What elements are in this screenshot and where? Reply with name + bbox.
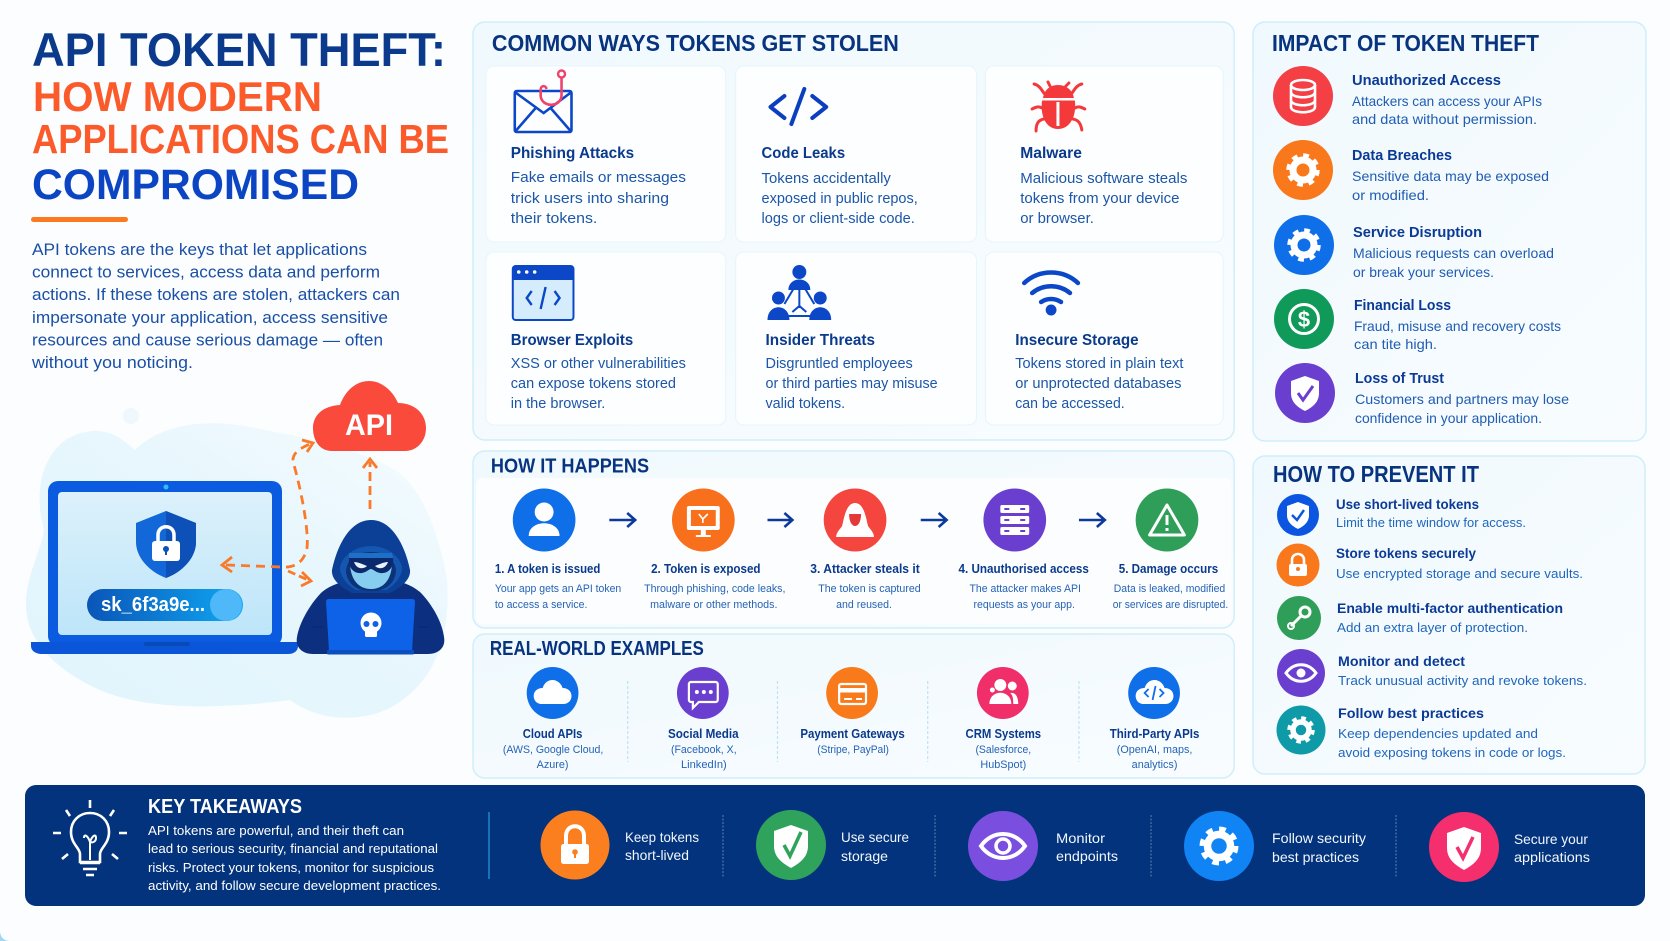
prevention: best practices: Keep dependencies updated and bbox=[1338, 726, 1538, 741]
step 4: requests as your app. bbox=[973, 599, 1075, 611]
impact: unauthorized access: Unauthorized Access bbox=[1352, 72, 1501, 89]
card: insecure storage bbox=[985, 252, 1223, 425]
impact: data breaches bbox=[1273, 140, 1549, 203]
icon: bug bbox=[1032, 82, 1085, 131]
step 4 bbox=[959, 488, 1089, 611]
example: social media: (Facebook, X, bbox=[671, 744, 737, 756]
API cloud: API bbox=[345, 409, 393, 442]
card: browser exploits: XSS or other vulnerabilities bbox=[511, 355, 686, 372]
card: code leaks: Code Leaks bbox=[762, 145, 845, 162]
prevention: monitor and detect bbox=[1277, 649, 1587, 697]
example: cloud APIs bbox=[503, 667, 603, 771]
banner: key takeaways bbox=[25, 785, 1645, 906]
intro paragraph: API tokens are the keys that let applications bbox=[32, 240, 367, 259]
step 1 bbox=[495, 488, 621, 611]
card: insider threats: Insider Threats bbox=[766, 332, 875, 349]
card: malware: tokens from your device bbox=[1020, 190, 1179, 207]
impact: service disruption: Service Disruption bbox=[1353, 224, 1482, 241]
step 5: 5. Damage occurs bbox=[1119, 561, 1218, 576]
impact: financial loss bbox=[1274, 289, 1561, 352]
impact: data breaches: or modified. bbox=[1352, 187, 1429, 203]
step 4: 4. Unauthorised access bbox=[959, 561, 1089, 576]
panel: common ways tokens get stolen bbox=[473, 22, 1234, 440]
card: insecure storage: can be accessed. bbox=[1015, 395, 1125, 412]
impact: data breaches: Data Breaches bbox=[1352, 147, 1452, 164]
example: third-party APIs bbox=[1110, 667, 1199, 771]
background blob bbox=[26, 423, 447, 718]
summary text bbox=[148, 823, 441, 893]
impact: service disruption: or break your services. bbox=[1353, 264, 1494, 280]
card: browser exploits bbox=[486, 252, 726, 425]
step 3 bbox=[810, 488, 921, 611]
summary text: lead to serious security, financial and reputational bbox=[148, 841, 438, 856]
icon: browser window bbox=[513, 266, 573, 320]
prevention: store securely bbox=[1276, 544, 1583, 586]
summary text: API tokens are powerful, and their theft can bbox=[148, 823, 404, 838]
intro paragraph bbox=[31, 240, 400, 372]
example: third-party APIs: analytics) bbox=[1132, 759, 1177, 771]
prevention: short-lived tokens: Limit the time window for access. bbox=[1336, 515, 1526, 530]
example: cloud APIs: Azure) bbox=[537, 759, 569, 771]
card: browser exploits: in the browser. bbox=[511, 395, 605, 412]
impact: loss of trust: Customers and partners may lose bbox=[1355, 391, 1569, 407]
impact: financial loss: Fraud, misuse and recovery costs bbox=[1354, 318, 1561, 334]
card: phishing attacks: trick users into sharing bbox=[511, 190, 669, 207]
heading: HOW IT HAPPENS bbox=[491, 455, 649, 478]
API cloud bbox=[313, 381, 426, 451]
takeaway: monitor endpoints: Monitor bbox=[1056, 830, 1105, 846]
step 5: or services are disrupted. bbox=[1113, 599, 1228, 611]
heading: IMPACT OF TOKEN THEFT bbox=[1272, 30, 1539, 56]
prevention: short-lived tokens: Use short-lived tokens bbox=[1336, 496, 1479, 512]
takeaway: keep tokens short-lived: short-lived bbox=[625, 847, 689, 863]
prevention: multi-factor authentication bbox=[1277, 596, 1563, 640]
example: payment gateways bbox=[800, 667, 905, 756]
prevention: multi-factor authentication: Add an extra layer of protection. bbox=[1337, 620, 1528, 635]
example: cloud APIs: Cloud APIs bbox=[523, 727, 582, 741]
prevention: best practices: avoid exposing tokens in code or logs. bbox=[1338, 745, 1566, 760]
icon: skull bbox=[360, 612, 382, 637]
card: code leaks bbox=[736, 66, 976, 242]
example: CRM systems: (Salesforce, bbox=[975, 744, 1031, 756]
example: CRM systems bbox=[966, 667, 1041, 771]
heading: HOW TO PREVENT IT bbox=[1273, 461, 1479, 487]
hacker bbox=[297, 520, 444, 654]
card: browser exploits: Browser Exploits bbox=[511, 332, 633, 349]
icon: envelope with hook bbox=[515, 70, 571, 132]
step 2: Through phishing, code leaks, bbox=[644, 583, 785, 595]
card: malware: or browser. bbox=[1020, 210, 1094, 227]
panel: impact of token theft bbox=[1253, 22, 1646, 441]
takeaway: secure your applications: Secure your bbox=[1514, 831, 1588, 847]
takeaway: keep tokens short-lived bbox=[540, 810, 699, 880]
step 1: Your app gets an API token bbox=[495, 583, 621, 595]
title: APPLICATIONS CAN BE bbox=[32, 116, 449, 162]
takeaway: use secure storage bbox=[756, 810, 909, 880]
step 2: malware or other methods. bbox=[650, 599, 777, 611]
intro paragraph: actions. If these tokens are stolen, attackers can bbox=[32, 285, 400, 304]
takeaway: secure your applications: applications bbox=[1514, 849, 1590, 865]
card: insider threats: Disgruntled employees bbox=[766, 355, 913, 372]
impact: loss of trust: confidence in your application. bbox=[1355, 410, 1542, 426]
card: malware: Malicious software steals bbox=[1020, 170, 1187, 187]
arrow bbox=[768, 513, 792, 527]
card: phishing attacks: Fake emails or messages bbox=[511, 169, 686, 186]
prevention: monitor and detect: Monitor and detect bbox=[1338, 653, 1465, 669]
example: social media: LinkedIn) bbox=[681, 759, 727, 771]
impact: unauthorized access: Attackers can access your APIs bbox=[1352, 93, 1542, 109]
example: CRM systems: CRM Systems bbox=[966, 727, 1041, 741]
summary text: activity, and follow secure development practices. bbox=[148, 878, 441, 893]
arrow bbox=[609, 513, 635, 527]
step 2: 2. Token is exposed bbox=[651, 561, 761, 576]
icon: shield with lock bbox=[136, 511, 196, 578]
card: insecure storage: Tokens stored in plain text bbox=[1015, 355, 1184, 372]
panel: how to prevent it bbox=[1253, 456, 1645, 774]
prevention: best practices bbox=[1276, 705, 1566, 760]
step 5 bbox=[1113, 488, 1228, 611]
icon: code brackets bbox=[770, 89, 826, 124]
icon: group of people bbox=[768, 265, 831, 320]
takeaway: keep tokens short-lived: Keep tokens bbox=[625, 829, 699, 845]
icon: light bulb bbox=[53, 800, 127, 875]
card: phishing attacks bbox=[486, 66, 726, 242]
prevention: multi-factor authentication: Enable multi-factor authentication bbox=[1337, 600, 1563, 616]
token pill: sk_6f3a9e... bbox=[101, 594, 205, 616]
prevention: monitor and detect: Track unusual activity and revoke tokens. bbox=[1338, 673, 1587, 688]
prevention: store securely: Store tokens securely bbox=[1336, 545, 1476, 561]
example: payment gateways: Payment Gateways bbox=[800, 727, 905, 741]
title bbox=[32, 23, 449, 209]
impact: data breaches: Sensitive data may be exposed bbox=[1352, 168, 1549, 184]
card: browser exploits: can expose tokens stored bbox=[511, 375, 676, 392]
takeaway: follow best practices: best practices bbox=[1272, 849, 1359, 865]
impact: service disruption: Malicious requests can overload bbox=[1353, 245, 1554, 261]
prevention: best practices: Follow best practices bbox=[1338, 705, 1484, 721]
card: insider threats: or third parties may misuse bbox=[766, 375, 938, 392]
impact: financial loss: can tite high. bbox=[1354, 336, 1437, 352]
impact: loss of trust bbox=[1275, 363, 1569, 426]
intro paragraph: resources and cause serious damage — often bbox=[32, 330, 383, 350]
arrow bbox=[921, 513, 947, 527]
prevention: store securely: Use encrypted storage and secure vaults. bbox=[1336, 566, 1583, 581]
icon: wifi bbox=[1024, 272, 1078, 313]
card: malware: Malware bbox=[1020, 145, 1082, 162]
card: phishing attacks: Phishing Attacks bbox=[511, 145, 634, 162]
card: phishing attacks: their tokens. bbox=[511, 210, 597, 227]
example: cloud APIs: (AWS, Google Cloud, bbox=[503, 744, 603, 756]
example: payment gateways: (Stripe, PayPal) bbox=[817, 744, 889, 756]
step 4: The attacker makes API bbox=[969, 583, 1081, 595]
takeaway: monitor endpoints: endpoints bbox=[1056, 848, 1118, 864]
summary text: risks. Protect your tokens, monitor for suspicious bbox=[148, 860, 435, 875]
intro paragraph: connect to services, access data and perform bbox=[32, 262, 380, 282]
impact: financial loss: $ bbox=[1298, 307, 1310, 332]
heading: KEY TAKEAWAYS bbox=[148, 796, 302, 818]
panel: real-world examples bbox=[473, 634, 1234, 778]
card: code leaks: exposed in public repos, bbox=[762, 190, 918, 207]
impact: loss of trust: Loss of Trust bbox=[1355, 370, 1444, 387]
impact: unauthorized access bbox=[1273, 66, 1542, 127]
step 1: to access a service. bbox=[495, 599, 587, 611]
example: social media: Social Media bbox=[668, 727, 739, 741]
illustration: laptop, hacker and API cloud bbox=[26, 381, 447, 718]
panel: how it happens bbox=[473, 451, 1234, 628]
example: third-party APIs: Third-Party APIs bbox=[1110, 727, 1199, 741]
title: HOW MODERN bbox=[33, 73, 322, 120]
intro paragraph: impersonate your application, access sensitive bbox=[32, 308, 388, 327]
impact: service disruption bbox=[1274, 215, 1554, 280]
title underline bbox=[31, 217, 128, 222]
title: API TOKEN THEFT: bbox=[32, 23, 446, 76]
card: code leaks: Tokens accidentally bbox=[762, 170, 891, 187]
laptop with token bbox=[31, 481, 298, 654]
takeaway: secure your applications bbox=[1429, 812, 1590, 882]
example: third-party APIs: (OpenAI, maps, bbox=[1117, 744, 1192, 756]
card: insecure storage: Insecure Storage bbox=[1015, 332, 1139, 349]
example: social media bbox=[668, 667, 739, 771]
takeaway: use secure storage: storage bbox=[841, 848, 888, 864]
card: insider threats bbox=[736, 252, 976, 425]
card: code leaks: logs or client-side code. bbox=[762, 210, 915, 227]
token pill bbox=[87, 589, 243, 621]
prevention: short-lived tokens bbox=[1277, 494, 1526, 536]
step 5: Data is leaked, modified bbox=[1114, 583, 1225, 595]
card: insecure storage: or unprotected databases bbox=[1015, 375, 1181, 392]
heading: REAL-WORLD EXAMPLES bbox=[490, 638, 704, 660]
attack arrows bbox=[222, 440, 377, 586]
step 3: 3. Attacker steals it bbox=[810, 561, 920, 576]
step 3: The token is captured bbox=[818, 583, 921, 595]
takeaway: use secure storage: Use secure bbox=[841, 829, 909, 845]
impact: financial loss: Financial Loss bbox=[1354, 297, 1451, 314]
card: insider threats: valid tokens. bbox=[766, 395, 845, 412]
takeaway: follow best practices bbox=[1184, 811, 1366, 881]
title: COMPROMISED bbox=[32, 161, 359, 209]
card: malware bbox=[985, 66, 1223, 242]
impact: unauthorized access: and data without permission. bbox=[1352, 111, 1537, 127]
arrow bbox=[1079, 513, 1105, 527]
intro paragraph: without you noticing. bbox=[31, 353, 193, 372]
step 2 bbox=[644, 488, 785, 611]
step 3: and reused. bbox=[836, 599, 892, 611]
takeaway: monitor endpoints bbox=[968, 811, 1118, 881]
step 1: 1. A token is issued bbox=[495, 561, 600, 576]
example: CRM systems: HubSpot) bbox=[980, 759, 1026, 771]
takeaway: follow best practices: Follow security bbox=[1272, 830, 1366, 846]
heading: COMMON WAYS TOKENS GET STOLEN bbox=[492, 30, 899, 56]
